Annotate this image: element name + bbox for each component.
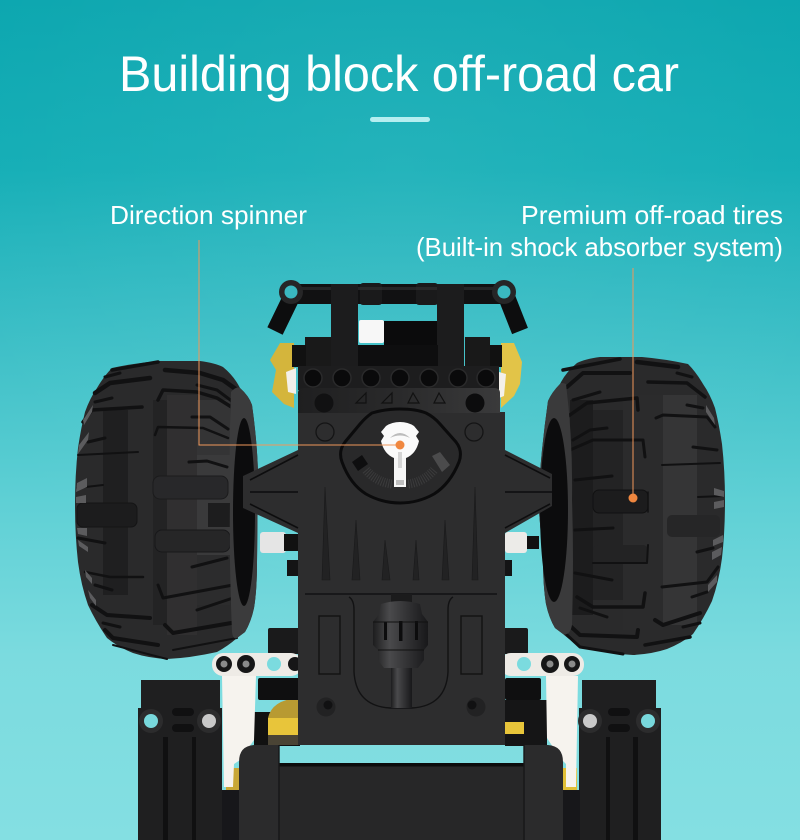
screws: [316, 698, 486, 716]
direction dial: [341, 409, 460, 503]
main chassis plate with arms: [243, 412, 552, 745]
callout line: tires: [628, 268, 638, 502]
suspension parts behind body: [222, 628, 580, 840]
centre knob and shaft: [373, 594, 428, 708]
title: Building block off-road car: [119, 46, 679, 102]
spinner pointer: [381, 422, 419, 487]
left tire: [75, 361, 258, 659]
white vertical braces: [222, 676, 578, 787]
left tire sidewall and hub hole: [230, 388, 258, 638]
label: direction spinner: Direction spinner: [110, 200, 307, 230]
title underline: [370, 117, 430, 122]
right tire sidewall and hub hole: [538, 383, 573, 634]
small round recesses: [316, 423, 483, 441]
lift arm with seven holes: [298, 366, 499, 390]
label: premium off-road tires: Premium off-road tires: [521, 200, 783, 230]
callout line: direction spinner: [199, 240, 404, 450]
axle white connectors: [260, 532, 539, 576]
white lift arms with holes: [212, 653, 584, 676]
toy car: [75, 280, 725, 840]
roll bar: [275, 280, 520, 368]
rear side towers: [138, 680, 661, 840]
lower panel outlines: [305, 594, 497, 708]
upper chassis block: [292, 320, 502, 369]
fin spikes on plate: [322, 487, 478, 580]
right tire: [538, 357, 725, 655]
battery base: [239, 745, 563, 840]
label: premium off-road tires: [416, 200, 783, 262]
label: premium off-road tires: (Built-in shock absorber system): [416, 232, 783, 262]
top plate with triangles: [298, 388, 500, 413]
yellow hubs: [270, 343, 522, 408]
